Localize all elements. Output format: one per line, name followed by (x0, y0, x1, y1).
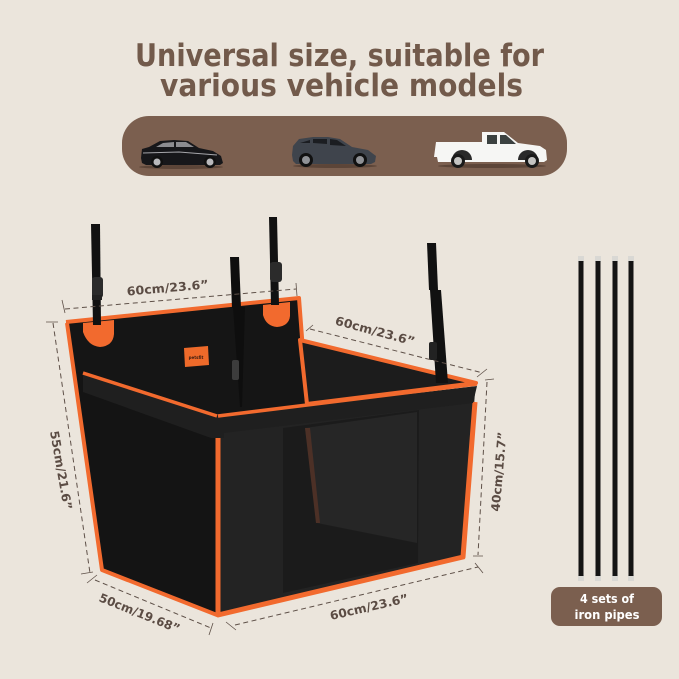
icon: iron pipes (578, 256, 634, 581)
strap right (427, 243, 448, 383)
strap left (91, 224, 103, 325)
dimension lines (53, 289, 487, 628)
dimension labels: 60cm/23.6” (334, 314, 416, 349)
dimension labels (47, 277, 509, 636)
title: Universal size, suitable for (135, 38, 545, 74)
strap middle (230, 257, 245, 407)
dimension labels: 60cm/23.6” (329, 591, 410, 623)
orange tab right (263, 302, 290, 327)
right back panel (300, 340, 476, 404)
rim band (83, 373, 477, 438)
dimension labels: 50cm/19.68” (97, 591, 182, 636)
seat cover product (66, 217, 477, 616)
dimension labels: 55cm/21.6” (47, 430, 75, 511)
label: 4 sets of iron pipes (551, 587, 662, 626)
label: 4 sets of iron pipes: 4 sets of (580, 592, 635, 606)
icon: black sedan (139, 140, 223, 169)
left side face (73, 372, 218, 616)
front mesh face (217, 392, 475, 616)
icon: white pickup truck (434, 132, 547, 168)
dimension labels: 40cm/15.7” (489, 431, 509, 512)
orange tab left (83, 320, 114, 347)
title (135, 38, 545, 104)
icon: grey crossover (292, 137, 377, 168)
dimension labels: 60cm/23.6” (126, 277, 209, 299)
logo label: petsfit (189, 355, 203, 360)
panel: vehicle models (122, 116, 567, 176)
back panel (66, 298, 307, 416)
title: various vehicle models (160, 68, 523, 104)
mesh window (283, 410, 419, 593)
label: 4 sets of iron pipes: iron pipes (574, 608, 640, 622)
strap back right (269, 217, 282, 305)
orange front edges (218, 402, 475, 615)
left orange edge (67, 323, 217, 615)
logo label (184, 346, 209, 367)
back panel orange edge (66, 298, 307, 403)
dimension ticks (46, 283, 494, 635)
